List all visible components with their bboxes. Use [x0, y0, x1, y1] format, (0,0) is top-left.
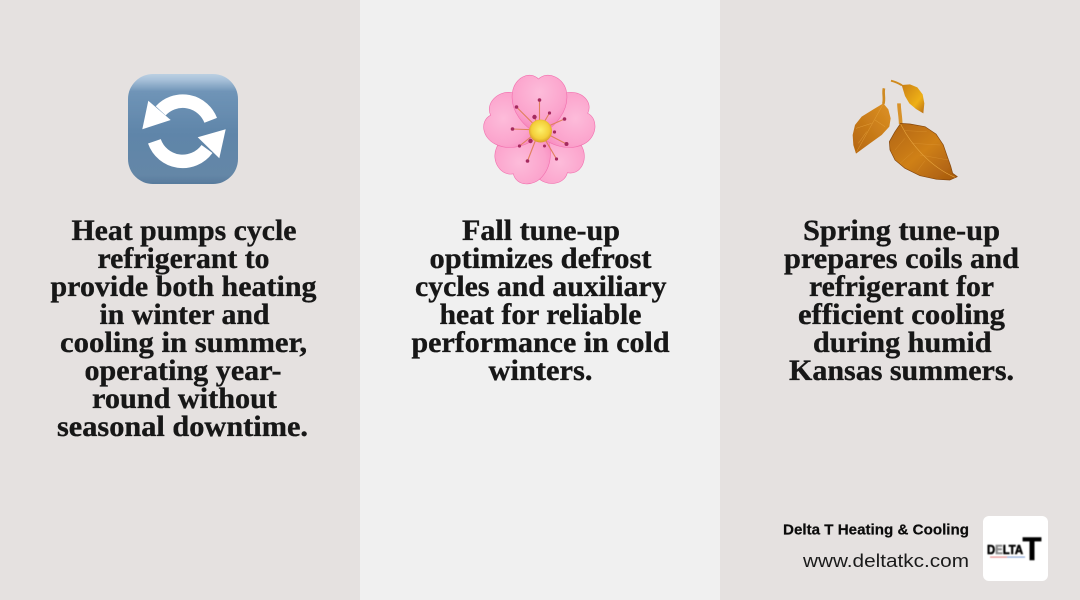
- text: spring tune-up description: Spring tune-up: [803, 214, 1000, 247]
- text: fall tune-up description: cycles and auxiliary: [415, 270, 666, 303]
- text: spring tune-up description: Kansas summers.: [789, 354, 1014, 387]
- text: spring tune-up description: during humid: [813, 326, 992, 359]
- text: spring tune-up description: efficient cooling: [798, 298, 1005, 331]
- panel: fall tune-up: [360, 0, 720, 600]
- website url: www.deltatkc.com: [802, 550, 969, 571]
- text: heat pump description: round without: [92, 382, 277, 415]
- text: fall tune-up description: optimizes defrost: [430, 242, 652, 275]
- text: fall tune-up description: Fall tune-up: [462, 214, 620, 247]
- text: fall tune-up description: winters.: [488, 354, 592, 387]
- text: fall tune-up description: heat for reliable: [440, 298, 642, 331]
- icon: cycle arrows button: [128, 74, 238, 184]
- company name: Delta T Heating & Cooling: [783, 522, 969, 538]
- text: fall tune-up description: [412, 214, 670, 387]
- text: spring tune-up description: prepares coils and: [784, 242, 1019, 275]
- logo: Delta T: DELTA: [987, 543, 1023, 557]
- panel: spring tune-up: [720, 0, 1080, 600]
- text: spring tune-up description: refrigerant for: [809, 270, 994, 303]
- logo: Delta T: [983, 516, 1048, 581]
- text: heat pump description: Heat pumps cycle: [72, 214, 296, 247]
- icon: pink blossom: [479, 75, 600, 191]
- text: heat pump description: in winter and: [100, 298, 270, 331]
- panel: heat pump cycle: [0, 0, 360, 600]
- text: heat pump description: refrigerant to: [98, 242, 270, 275]
- logo: Delta T: T: [1022, 531, 1042, 567]
- text: heat pump description: cooling in summer,: [60, 326, 307, 359]
- text: heat pump description: seasonal downtime.: [57, 410, 308, 443]
- text: fall tune-up description: performance in cold: [412, 326, 670, 359]
- text: heat pump description: provide both heating: [50, 270, 316, 303]
- text: spring tune-up description: [784, 214, 1019, 387]
- text: heat pump description: [50, 214, 316, 443]
- text: heat pump description: operating year-: [84, 354, 282, 387]
- icon: fallen leaves: [853, 81, 957, 180]
